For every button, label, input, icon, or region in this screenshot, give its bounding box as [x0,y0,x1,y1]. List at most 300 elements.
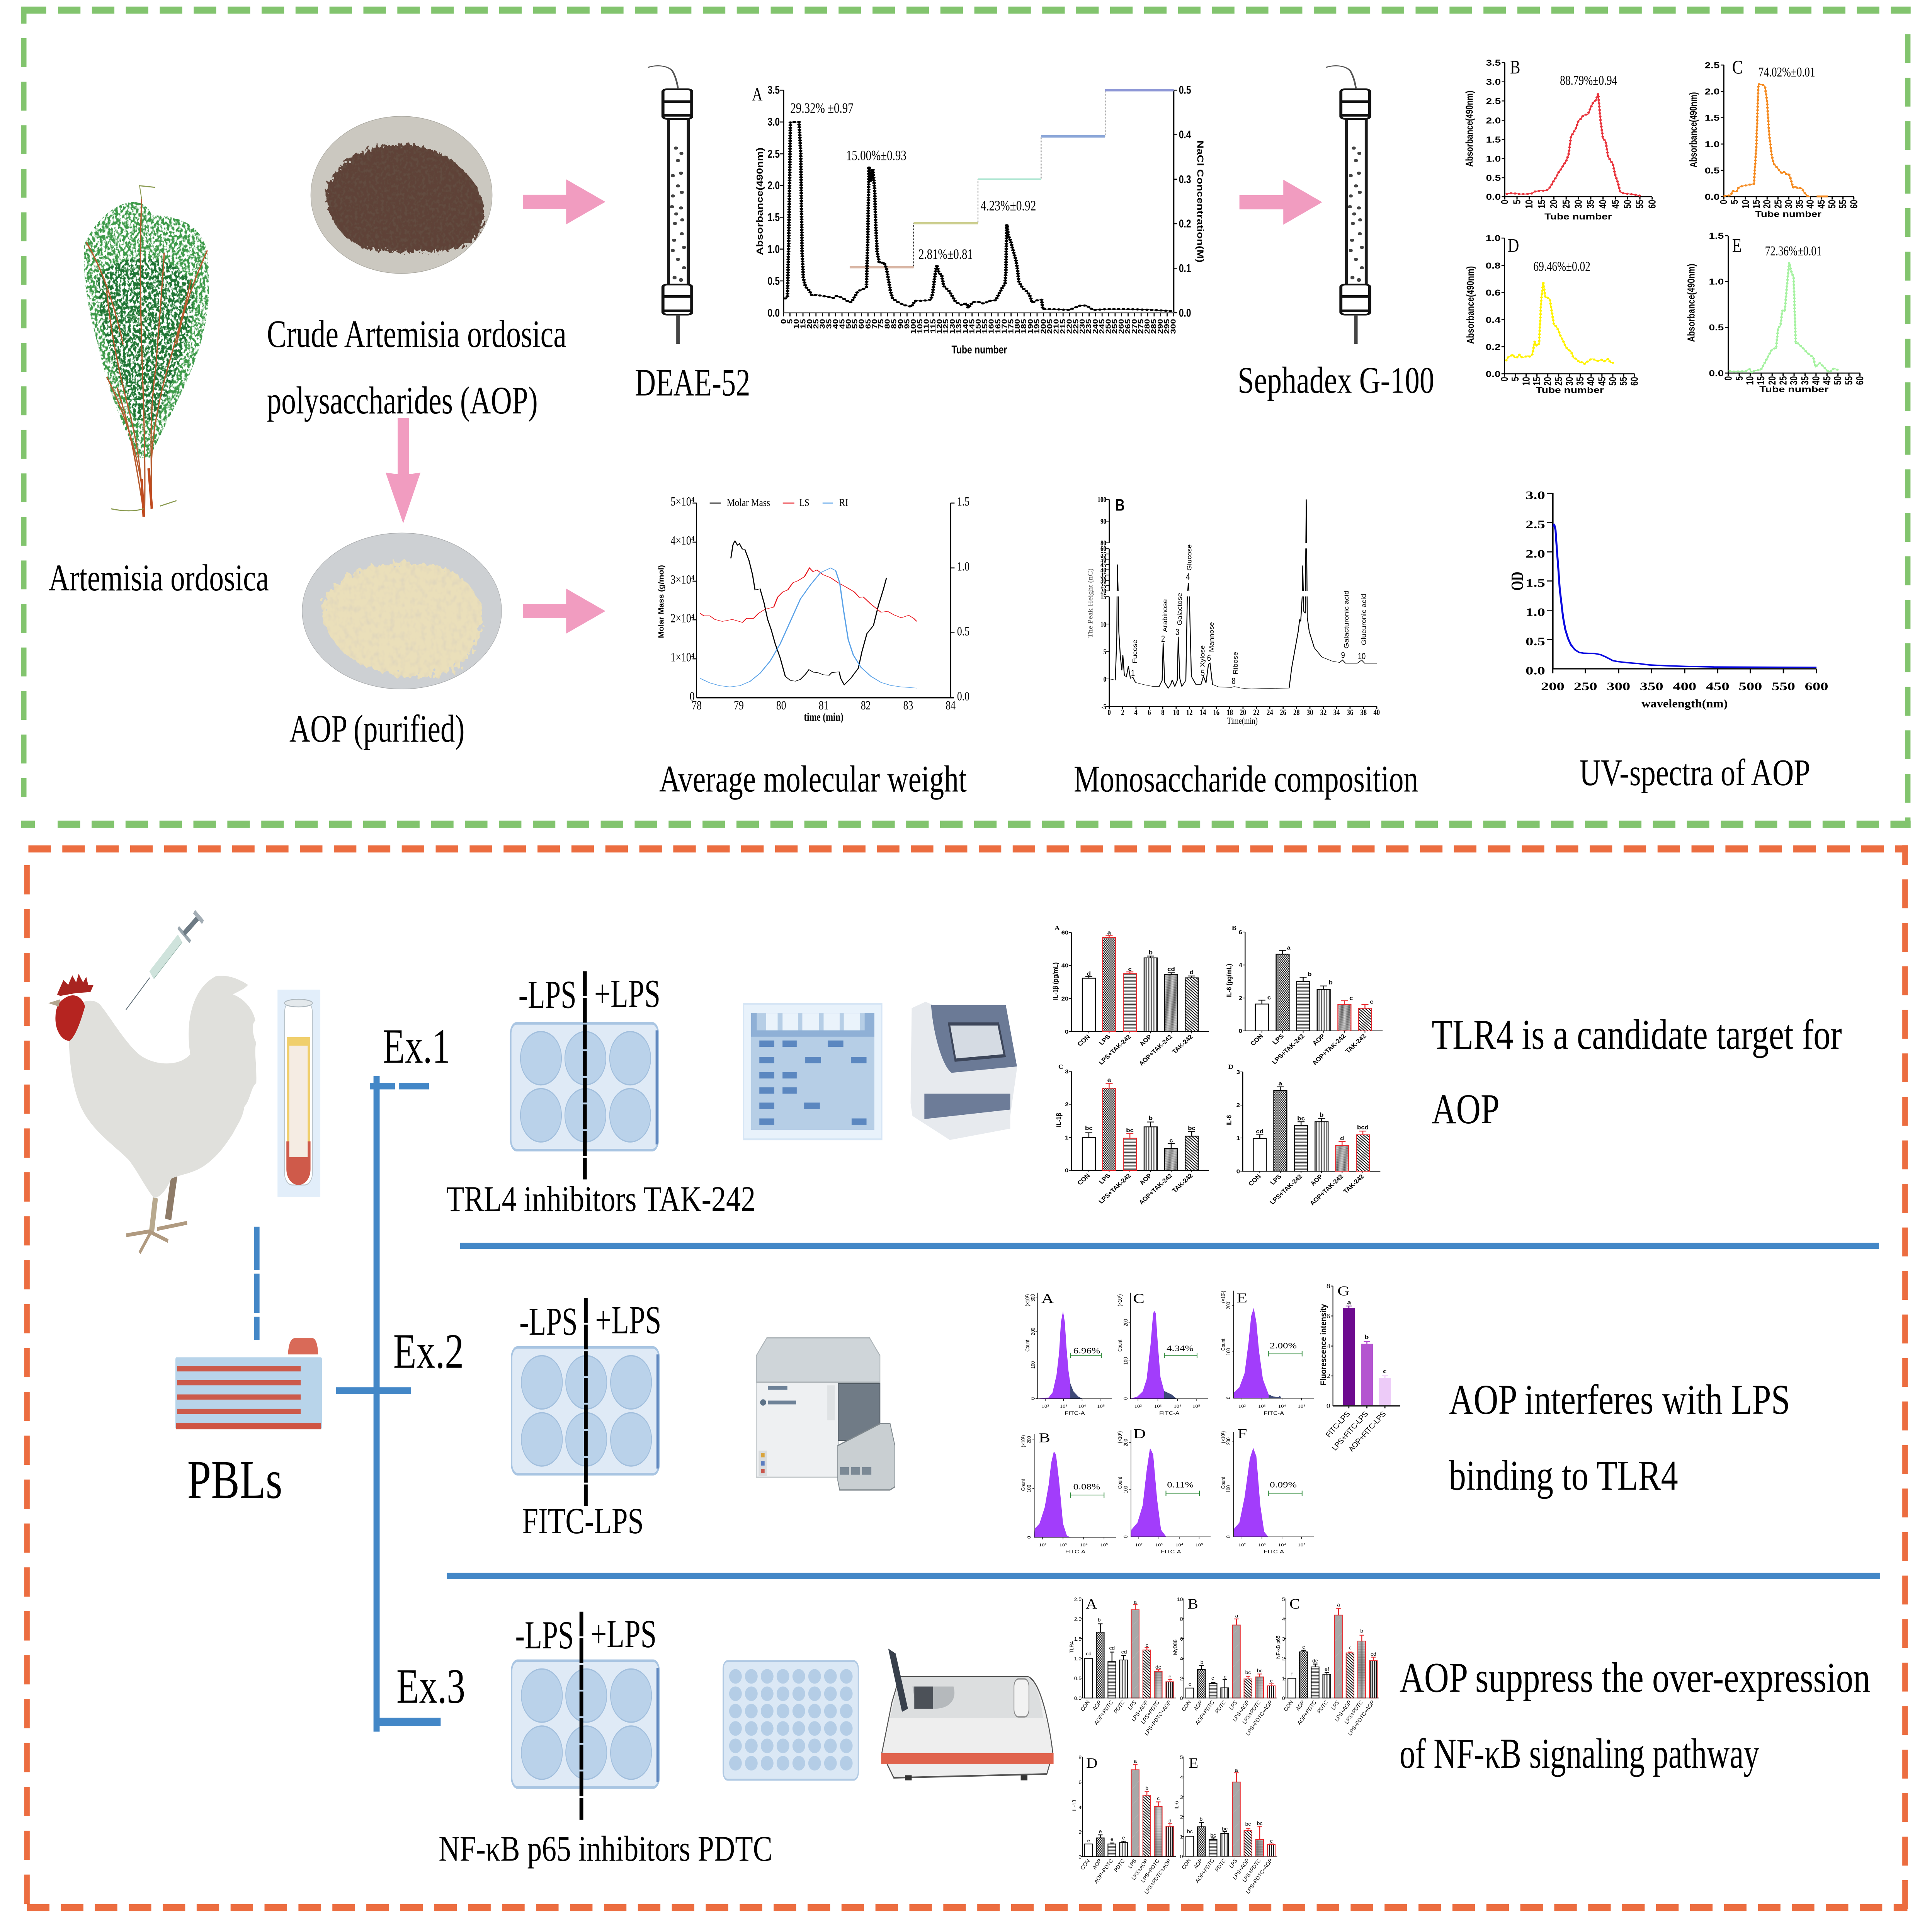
chart B: monosaccharide composition chromatogram: Arabinose [1162,599,1169,632]
bar chart A: TLR4: CON [1079,1699,1091,1712]
chart A: DEAE-52 elution profile: 180 [1014,319,1021,334]
chart E: light green elution curve: 30 [1788,376,1799,385]
chart C: orange elution curve: 5 [1729,200,1740,204]
bar chart A: TLR4: cd [1086,1651,1092,1656]
histogram F: 200 [1225,1437,1231,1445]
histogram D: D [1133,1426,1146,1441]
chart B: monosaccharide composition chromatogram: 9 [1341,650,1345,660]
chart D: yellow elution curve: 0 [1499,377,1510,381]
histogram D: 10⁴ [1175,1542,1183,1547]
bar chart D: IL-6 expression: AOP+TAK-242 [1308,1173,1345,1207]
icon: Ex.2 six-well plate [512,1347,659,1474]
bar chart B: IL-6 protein: b [1308,971,1312,978]
bar chart B: MyD88: 6 [1180,1636,1183,1642]
text: AOP suppress the over-expression of NF-κB signaling pathway: AOP suppress the over-expression [1400,1655,1870,1701]
bar chart E: IL-6: 4 [1180,1774,1183,1780]
bar chart C: IL-1β expression: c [1169,1138,1173,1144]
bar chart A: IL-1β protein: c [1128,966,1132,973]
chart panel: Ex.1 cytokine bars [1052,924,1383,1207]
bar chart C: IL-1β expression: 1 [1065,1135,1069,1141]
chart: UV spectra of AOP: 0.5 [1526,635,1545,648]
bar chart A: TLR4: de [1155,1664,1161,1670]
arrow: DEAE-52 to Sephadex G-100 [1240,180,1322,225]
bar chart E: IL-6: a [1235,1767,1238,1773]
bar chart B: IL-6 protein: TAK-242 [1344,1033,1368,1054]
chart D: yellow elution curve: 15 [1531,377,1543,386]
chart B: monosaccharide composition chromatogram: Glucose [1186,544,1193,571]
bar chart B: IL-6 protein: 6 [1239,929,1242,935]
chart B: monosaccharide composition chromatogram: 2 [1121,708,1124,717]
chart B: red elution curve: 2.0 [1486,116,1501,126]
histogram D: 0.11% [1167,1480,1194,1489]
chart A: DEAE-52 elution profile: 105 [916,319,924,334]
chart B: monosaccharide composition chromatogram: 60 [1100,544,1106,553]
chart A: DEAE-52 elution profile: 250 [1105,319,1112,334]
chart A: DEAE-52 elution profile: 2.81%±0.81 [918,247,973,262]
chart: UV spectra of AOP: 0.0 [1526,664,1545,677]
chart A: DEAE-52 elution profile: 3.5 [767,83,780,96]
histogram F: FITC-A [1264,1549,1284,1554]
bar chart B: IL-6 protein: c [1370,999,1374,1005]
chart A: DEAE-52 elution profile: NaCl Concentration(M) [1195,140,1205,263]
histogram B: Count [1020,1479,1026,1491]
bar chart B: MyD88: LPS+PDTC+AOP [1244,1699,1274,1736]
chart A: DEAE-52 elution profile: 10 [793,319,801,329]
bar chart A: TLR4: 2.5 [1074,1597,1082,1602]
chart A: DEAE-52 elution profile: 225 [1072,319,1080,334]
bar chart C: NF-κB p65: LPS+PDTC+AOP [1346,1699,1376,1736]
histogram C: 10⁵ [1192,1404,1200,1409]
chart: molar mass LS and RI traces: 1.5 [957,495,969,509]
chart B: monosaccharide composition chromatogram: 14 [1200,708,1206,717]
chart B: monosaccharide composition chromatogram: The Peak Height (nC) [1086,568,1094,638]
bar chart A: IL-1β protein: LPS+TAK-242 [1097,1034,1133,1066]
bar chart A: TLR4: AOP+PDTC [1092,1699,1114,1726]
bar chart A: IL-1β protein [1052,924,1209,1067]
chart: UV spectra of AOP: 450 [1706,680,1730,693]
bar chart D: IL-1β: c [1157,1796,1160,1801]
bar chart E: IL-6: b [1199,1816,1202,1822]
bar chart C: NF-κB p65: 1 [1282,1676,1285,1682]
bar chart E: IL-6: bc [1187,1828,1193,1834]
histogram B: 0.08% [1073,1482,1100,1492]
histogram C: FITC-A [1159,1411,1180,1416]
bar chart G: fluorescence intensity [1319,1283,1400,1453]
text: TLR4 is a candidate target for AOP [1432,1012,1842,1133]
bar chart A: TLR4: e [1168,1674,1172,1679]
chart D: yellow elution curve: Tube number [1536,385,1604,395]
bar chart E: IL-6: bc [1257,1820,1263,1826]
bar chart C: NF-κB p65: PDTC [1316,1699,1330,1714]
bar chart A: IL-1β protein: 20 [1061,996,1069,1002]
chart: UV spectra of AOP: 600 [1805,680,1828,693]
chart A: DEAE-52 elution profile: 2.5 [767,147,780,160]
chart: molar mass LS and RI traces: Molar Mass (g/mol) [657,565,665,638]
bar chart A: IL-1β protein: LPS [1098,1034,1112,1046]
text: FITC-LPS: FITC-LPS [522,1501,644,1541]
chart B: red elution curve: 40 [1597,200,1608,209]
bar chart G: fluorescence intensity: LPS+FITC-LPS [1330,1410,1371,1452]
chart C: orange elution curve [1688,57,1859,219]
bar chart C: NF-κB p65: 5 [1282,1597,1285,1602]
histogram E: 10⁵ [1298,1404,1305,1409]
histogram C: 4.34% [1167,1344,1194,1353]
histogram A: FITC-A [1065,1411,1085,1416]
photo: purified AOP powder [302,533,502,689]
bar chart C: IL-1β expression: AOP [1138,1172,1153,1186]
text: DEAE-52: DEAE-52 [635,361,750,404]
histogram B: 100 [1026,1485,1032,1492]
chart B: monosaccharide composition chromatogram: -5 [1101,702,1106,711]
icon: qPCR machine [911,1002,1017,1140]
bar chart D: IL-1β: CON [1079,1858,1091,1871]
histogram B: 10⁴ [1080,1542,1088,1547]
histogram E: 200 [1225,1302,1231,1309]
bar chart C: IL-1β expression: AOP+TAK-242 [1138,1172,1174,1206]
chart B: monosaccharide composition chromatogram: 100 [1097,495,1106,503]
chart D: yellow elution curve: 50 [1607,377,1618,386]
chart B: monosaccharide composition chromatogram: Time(min) [1227,716,1258,726]
chart A: DEAE-52 elution profile: 0.1 [1179,262,1191,275]
histogram B: 10² [1039,1542,1046,1547]
chart A: DEAE-52 elution profile: 85 [890,319,898,329]
chart: molar mass LS and RI traces: time (min) [804,711,844,723]
bar chart A: TLR4: 0.0 [1074,1696,1082,1701]
text: Ex.3: Ex.3 [396,1659,465,1714]
chart B: red elution curve: 25 [1561,200,1571,209]
chart B: monosaccharide composition chromatogram: 50 [1100,555,1106,564]
text: Artemisia ordosica: Artemisia ordosica [49,557,269,599]
chart A: DEAE-52 elution profile: 190 [1027,319,1034,334]
chart D: yellow elution curve: 0.6 [1486,288,1500,298]
chart A: DEAE-52 elution profile: 50 [845,319,852,329]
chart B: monosaccharide composition chromatogram: 35 [1100,571,1106,580]
chart B: monosaccharide composition chromatogram: 26 [1280,708,1286,717]
chart A: DEAE-52 elution profile: 0.5 [767,274,780,287]
bar chart C: NF-κB p65: CON [1282,1699,1294,1712]
chart A: DEAE-52 elution profile: 1.0 [767,243,780,255]
histogram F: 10² [1238,1542,1246,1547]
chart panel: Ex.3 gene expression bars [1069,1596,1379,1895]
chart E: light green elution curve: 20 [1767,376,1777,385]
bar chart B: IL-6 protein: 0 [1239,1028,1242,1034]
chart: UV spectra of AOP: 3.0 [1526,489,1545,502]
bar chart A: TLR4: LPS [1126,1699,1138,1711]
bar chart B: MyD88: b [1201,1660,1204,1665]
bar chart G: fluorescence intensity: 0 [1327,1403,1330,1409]
chart: molar mass LS and RI traces: 1×10⁴ [671,651,695,664]
bar chart D: IL-1β: e [1111,1837,1114,1842]
histogram E: 2.00% [1270,1341,1297,1350]
icon: flow cytometer [756,1338,895,1490]
bar chart A: TLR4: LPS+PDTC [1139,1699,1161,1725]
bar chart C: IL-1β expression: 3 [1065,1069,1069,1075]
chart B: red elution curve: 15 [1536,200,1547,209]
chart B: monosaccharide composition chromatogram: 32 [1320,708,1327,717]
bar chart B: MyD88: 0 [1180,1696,1183,1701]
chart A: DEAE-52 elution profile: 55 [851,319,859,329]
histogram D: Count [1117,1477,1123,1489]
histogram F: F [1238,1426,1247,1441]
chart A: DEAE-52 elution profile: 0.0 [767,306,780,319]
chart: molar mass LS and RI traces: 84 [946,699,956,713]
icon: multi-well ELISA plate [723,1661,858,1780]
bar chart B: IL-6 protein: LPS [1271,1033,1286,1046]
histogram E: Count [1220,1338,1226,1350]
bar chart C: NF-κB p65: AOP+PDTC [1296,1699,1318,1726]
histogram F [1220,1426,1314,1554]
histogram F: 10⁴ [1278,1542,1286,1547]
chart: UV spectra of AOP [1508,489,1828,710]
chart B: monosaccharide composition chromatogram: 20 [1100,587,1106,595]
chart D: yellow elution curve: 69.46%±0.02 [1533,259,1590,274]
text: Ex.3 LPS labels [515,1612,656,1657]
bar chart E: IL-6 [1173,1755,1277,1895]
bar chart B: IL-6 protein [1226,924,1383,1066]
histogram F: 0.09% [1270,1480,1297,1489]
chart D: yellow elution curve: D [1508,235,1519,256]
bar chart A: IL-1β protein: d [1190,969,1194,976]
chart A: DEAE-52 elution profile: 15 [799,319,807,329]
chart B: monosaccharide composition chromatogram: 20 [1240,708,1246,717]
histogram E: (×10¹) [1220,1291,1226,1303]
chart B: monosaccharide composition chromatogram: 0 [1104,675,1106,684]
chart A: DEAE-52 elution profile: 1.5 [767,211,780,224]
chart A: DEAE-52 elution profile: 3.0 [767,115,780,128]
chart E: light green elution curve: 5 [1734,376,1745,381]
bar chart B: MyD88: LPS+AOP [1231,1699,1251,1722]
chart B: monosaccharide composition chromatogram: 40 [1373,708,1380,717]
bar chart A: IL-1β protein: AOP+TAK-242 [1138,1034,1174,1067]
chart A: DEAE-52 elution profile: 30 [819,319,827,329]
bar chart C: IL-1β expression: 0 [1065,1168,1069,1174]
chart C: orange elution curve: 0.0 [1705,192,1719,202]
chart A: DEAE-52 elution profile: 4.23%±0.92 [980,198,1036,214]
bar chart B: IL-6 protein: 4 [1239,963,1242,968]
bar chart B: MyD88: PDTC [1213,1699,1227,1714]
chart E: light green elution curve: Absorbance(490nm) [1685,264,1697,342]
bar chart D: IL-6 expression: LPS [1269,1173,1283,1186]
chart B: red elution curve: 5 [1511,200,1522,204]
chart: UV spectra of AOP: 350 [1640,680,1663,693]
chart A: DEAE-52 elution profile: 255 [1111,319,1119,334]
histogram E: E [1237,1290,1247,1305]
chart E: light green elution curve: 15 [1755,376,1767,385]
chart B: red elution curve: 60 [1646,200,1658,209]
chart: molar mass LS and RI traces: 81 [819,699,828,713]
chart A: DEAE-52 elution profile: 40 [832,319,840,329]
bar chart A: TLR4: A [1086,1596,1097,1612]
chart B: monosaccharide composition chromatogram: 10 [1100,620,1106,629]
text: Sephadex G-100: Sephadex G-100 [1238,359,1434,401]
divider line: Ex.2 plate [583,1298,588,1506]
histogram C: 10⁴ [1173,1404,1182,1409]
chart B: monosaccharide composition chromatogram: 10 [1173,708,1179,717]
chart C: orange elution curve: 55 [1837,200,1848,209]
photo: crude AOP powder [311,116,492,274]
chart B: monosaccharide composition chromatogram: 8 [1161,708,1164,717]
chart A: DEAE-52 elution profile: 220 [1066,319,1073,334]
chart D: yellow elution curve: 40 [1585,377,1596,386]
divider: Ex.1 and Ex.2 [460,1243,1879,1249]
arrow: purified AOP to characterization [523,588,605,634]
bar chart A: IL-1β protein: CON [1076,1034,1092,1048]
bar chart B: IL-6 protein: IL-6 (pg/mL) [1226,964,1233,998]
chart A: DEAE-52 elution profile: 265 [1124,319,1132,334]
histogram A: 300 [1030,1294,1036,1302]
chart: molar mass LS and RI traces [657,495,969,723]
chart A: DEAE-52 elution profile: 45 [838,319,846,329]
chart A: DEAE-52 elution profile: 95 [903,319,911,329]
chart A: DEAE-52 elution profile: 100 [910,319,917,334]
text: Ex.2 LPS labels: -LPS [519,1299,578,1344]
divider line: Ex.1 plate [582,971,587,1179]
histogram E: 10⁴ [1278,1404,1286,1409]
chart A: DEAE-52 elution profile: 170 [1001,319,1009,334]
bar chart A: TLR4: a [1134,1599,1137,1605]
bar chart G: fluorescence intensity: 8 [1327,1283,1330,1289]
chart B: red elution curve: 20 [1548,200,1560,209]
chart A: DEAE-52 elution profile: 275 [1137,319,1145,334]
bar chart D: IL-1β: b [1145,1786,1148,1791]
bar chart D: IL-1β: e [1099,1828,1102,1834]
bar chart B: MyD88: CON [1180,1699,1192,1712]
histogram D: 200 [1122,1439,1129,1446]
bar chart D: IL-6 expression [1226,1063,1380,1207]
chart B: monosaccharide composition chromatogram: Galacturonic acid [1343,590,1350,649]
chart A: DEAE-52 elution profile: 29.32% ±0.97 [790,101,854,116]
histogram E: 0 [1225,1397,1231,1399]
text: AOP (purified): AOP (purified) [289,707,464,750]
chart B: monosaccharide composition chromatogram: 55 [1100,550,1106,558]
chart B: monosaccharide composition chromatogram: 30 [1100,576,1106,585]
icon: western blot gel [744,1004,882,1139]
chart B: monosaccharide composition chromatogram: Ribose [1232,651,1239,675]
bar chart D: IL-6 expression: a [1279,1081,1282,1087]
histogram F: Count [1220,1477,1226,1489]
chart: molar mass LS and RI traces: LS [799,497,810,509]
bar chart D: IL-1β: LPS+PDTC [1139,1858,1161,1883]
chart: UV spectra of AOP: 250 [1574,680,1597,693]
bar chart D: IL-1β: 8 [1078,1755,1082,1760]
chart: molar mass LS and RI traces: 0 [690,690,695,703]
bar chart B: IL-6 protein: c [1349,995,1353,1002]
chart A: DEAE-52 elution profile: 2.0 [767,179,780,192]
text: Crude Artemisia ordosica polysaccharides (AOP): Crude Artemisia ordosica [267,312,566,355]
bar chart A: TLR4: b [1098,1617,1101,1622]
chart C: orange elution curve: 50 [1827,200,1838,209]
chart A: DEAE-52 elution profile: 120 [936,319,944,334]
histogram C: Count [1117,1340,1123,1352]
bar chart D: IL-1β [1071,1755,1176,1895]
chart B: monosaccharide composition chromatogram: 6 [1148,708,1151,717]
bar chart G: fluorescence intensity: a [1347,1299,1351,1306]
chart B: red elution curve: 1.5 [1486,135,1501,145]
bar chart E: IL-6: bc [1210,1832,1216,1838]
bar chart B: MyD88: MyD88 [1172,1639,1178,1655]
bar chart C: NF-κB p65: cd [1371,1651,1376,1657]
bar chart D: IL-1β: e [1087,1838,1090,1844]
chart E: light green elution curve: 45 [1821,376,1832,385]
chart A: DEAE-52 elution profile: 75 [877,319,885,329]
bar chart A: TLR4 [1069,1596,1176,1736]
histogram D: (×10¹) [1117,1431,1123,1443]
histogram D: 100 [1122,1486,1129,1493]
icon: Ex.1 six-well plate [511,1023,658,1150]
histogram A: Count [1024,1340,1031,1352]
histogram A: 0 [1030,1397,1036,1400]
bar chart D: IL-1β: D [1086,1755,1097,1771]
chart C: orange elution curve: 45 [1816,200,1827,209]
bar chart B: MyD88: B [1188,1596,1198,1612]
chart C: orange elution curve: Absorbance(490nm) [1688,92,1699,167]
bar chart D: IL-6 expression: 1 [1236,1135,1240,1141]
chart B: red elution curve: Tube number [1544,212,1612,221]
bar chart C: IL-1β expression: bc [1126,1128,1134,1134]
bar chart A: IL-1β protein: 60 [1061,930,1069,936]
chart C: orange elution curve: 35 [1794,200,1805,209]
bar chart A: TLR4: cd [1121,1649,1127,1655]
chart panel: Ex.2 flow cytometry [1020,1283,1400,1554]
chart B: red elution curve: 3.5 [1486,58,1501,68]
chart B: monosaccharide composition chromatogram: 40 [1100,566,1106,574]
bar chart E: IL-6: AOP+PDTC [1193,1857,1216,1884]
chart B: monosaccharide composition chromatogram: 80 [1100,539,1106,547]
chart A: DEAE-52 elution profile: 70 [871,319,879,329]
arrow: crude AOP to purified AOP [386,418,420,523]
bar chart D: IL-6 expression: D [1228,1063,1233,1070]
histogram A: 200 [1030,1328,1036,1335]
chart: UV spectra of AOP: wavelength(nm) [1641,697,1728,710]
bar chart D: IL-1β: e [1122,1835,1125,1841]
chart B: monosaccharide composition chromatogram: Fucose [1132,639,1139,663]
chart B: monosaccharide composition chromatogram: 3 [1175,628,1179,637]
icon: Artemisia ordosica plant [84,186,209,517]
bar chart D: IL-6 expression: IL-6 [1226,1115,1233,1126]
chart: molar mass LS and RI traces: Molar Mass [727,497,770,509]
bar chart D: IL-6 expression: b [1320,1112,1324,1118]
chart A: DEAE-52 elution profile: 245 [1098,319,1106,334]
chart B: monosaccharide composition chromatogram: Xylose [1199,645,1206,667]
chart A: DEAE-52 elution profile: 0.3 [1179,173,1191,185]
chart E: light green elution curve: 0.0 [1709,369,1724,378]
bar chart E: IL-6: 1 [1180,1834,1183,1840]
bar chart B: IL-6 protein: LPS+TAK-242 [1270,1033,1306,1065]
bar chart C: NF-κB p65: LPS+PDTC [1343,1699,1364,1725]
text: NF-κB p65 inhibitors PDTC: NF-κB p65 inhibitors PDTC [439,1829,772,1869]
chart B: red elution curve: 45 [1610,200,1621,209]
chart B: monosaccharide composition chromatogram: Glucuronic acid [1361,594,1367,645]
bar chart C: NF-κB p65: 4 [1282,1616,1285,1622]
histogram C: 100 [1122,1357,1129,1365]
chart A: DEAE-52 elution profile: 140 [962,319,969,334]
bar chart A: IL-1β protein: a [1107,930,1111,936]
chart A: DEAE-52 elution profile: 165 [994,319,1002,334]
bar chart D: IL-1β: 4 [1078,1804,1082,1810]
bar chart E: IL-6: LPS [1228,1857,1239,1869]
chart: molar mass LS and RI traces: 4×10⁴ [671,534,695,548]
bar chart C: NF-κB p65: c [1302,1645,1305,1650]
chart A: DEAE-52 elution profile: 160 [988,319,995,334]
histogram F: 0 [1225,1536,1231,1538]
histogram A: 10² [1041,1404,1049,1409]
chart: molar mass LS and RI traces: 79 [734,699,744,713]
bar chart D: IL-1β: LPS [1126,1858,1138,1869]
chart A: DEAE-52 elution profile: 195 [1033,319,1041,334]
histogram A: (×10¹) [1024,1294,1031,1306]
chart: molar mass LS and RI traces: 1.0 [957,560,969,574]
text: TLR4 is a candidate target for AOP: AOP [1432,1086,1500,1133]
